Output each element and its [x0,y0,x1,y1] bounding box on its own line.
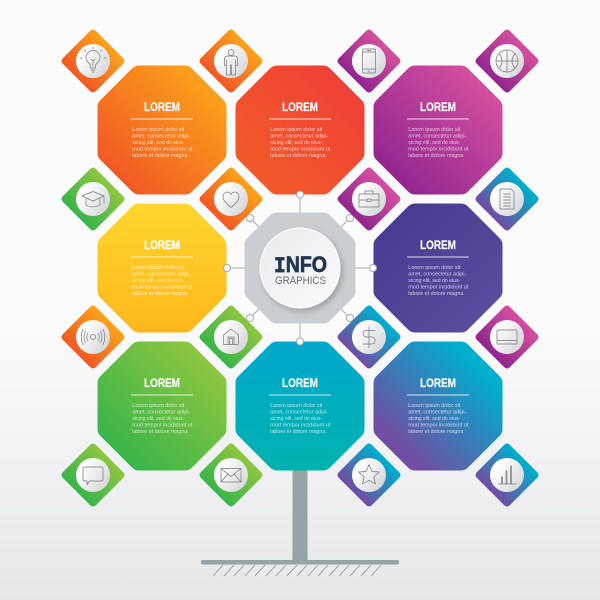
panel: yellow: labore et dolore magna [132,291,188,297]
icon tile: smartphone [338,30,400,92]
icon tile: light bulb [62,30,124,92]
panel: teal: labore et dolore magna [270,429,326,435]
panel: teal: sicing elit, sed do eius- [270,416,322,422]
icon tile: card [476,306,538,368]
panel: yellow [98,204,226,332]
icon tile: speech bubble [62,444,124,506]
panel: teal: amet, consectetur adipi- [270,410,328,416]
panel: green [98,342,226,470]
panel: indigo: LOREM [420,238,456,252]
panel: teal: LOREM [282,376,318,390]
panel: yellow: mod tempor incididunt ut [132,284,193,290]
panel: indigo: mod tempor incididunt ut [408,284,469,290]
panel: indigo: sicing elit, sed do eius- [408,278,460,284]
panel: red: LOREM [282,100,318,114]
panel: purple [374,66,502,194]
icon tile: person [200,30,262,92]
panel: yellow: sicing elit, sed do eius- [132,278,184,284]
panel: indigo: labore et dolore magna [408,291,464,297]
panel: blue: LOREM [420,376,456,390]
panel: red: Lorem ipsum dolor sit [270,127,323,133]
panel: green: mod tempor incididunt ut [132,422,193,428]
central hub [244,212,356,324]
panel: purple: mod tempor incididunt ut [408,146,469,152]
panel: green: sicing elit, sed do eius- [132,416,184,422]
panel: orange: amet, consectetur adipi- [132,134,190,140]
panel: indigo: amet, consectetur adipi- [408,272,466,278]
panel: green: amet, consectetur adipi- [132,410,190,416]
panel: indigo [374,204,502,332]
icon tile: house [200,306,262,368]
icon tile: basketball [476,30,538,92]
icon tile: dollar [338,306,400,368]
panel: blue: mod tempor incididunt ut [408,422,469,428]
panel: teal: Lorem ipsum dolor sit [270,403,323,409]
panel: purple: Lorem ipsum dolor sit [408,127,461,133]
icon tile: envelope [200,444,262,506]
panel: red [236,66,364,194]
panel: green: labore et dolore magna [132,429,188,435]
panel: green: LOREM [144,376,180,390]
panel: teal: mod tempor incididunt ut [270,422,331,428]
panel: red: amet, consectetur adipi- [270,134,328,140]
panel: purple: amet, consectetur adipi- [408,134,466,140]
connectors [224,191,376,345]
panel: orange: sicing elit, sed do eius- [132,140,184,146]
icon tile: star [338,444,400,506]
icon tile: bar chart [476,444,538,506]
panel: orange [98,66,226,194]
icon tile: wireless signal [62,306,124,368]
panel: red: sicing elit, sed do eius- [270,140,322,146]
icon tile: document [476,168,538,230]
icon tile: heart [200,168,262,230]
panel: orange: Lorem ipsum dolor sit [132,127,185,133]
panel: yellow: amet, consectetur adipi- [132,272,190,278]
panel: purple: LOREM [420,100,456,114]
panel: blue: labore et dolore magna [408,429,464,435]
panel: blue [374,342,502,470]
panel: purple: labore et dolore magna [408,153,464,159]
panel: yellow: LOREM [144,238,180,252]
panel: red: labore et dolore magna [270,153,326,159]
panel: teal [236,342,364,470]
panel: green: Lorem ipsum dolor sit [132,403,185,409]
panel: yellow: Lorem ipsum dolor sit [132,265,185,271]
central hub: GRAPHICS [275,275,326,287]
panel: blue: sicing elit, sed do eius- [408,416,460,422]
panel: blue: Lorem ipsum dolor sit [408,403,461,409]
panel: blue: amet, consectetur adipi- [408,410,466,416]
icon tile: graduation cap [62,168,124,230]
panel: indigo: Lorem ipsum dolor sit [408,265,461,271]
panel: purple: sicing elit, sed do eius- [408,140,460,146]
panel: orange: mod tempor incididunt ut [132,146,193,152]
panel: orange: LOREM [144,100,180,114]
tree trunk and ground [201,465,399,576]
panel: orange: labore et dolore magna [132,153,188,159]
central hub: INFO [274,252,327,279]
icon tile: briefcase [338,168,400,230]
panel: red: mod tempor incididunt ut [270,146,331,152]
